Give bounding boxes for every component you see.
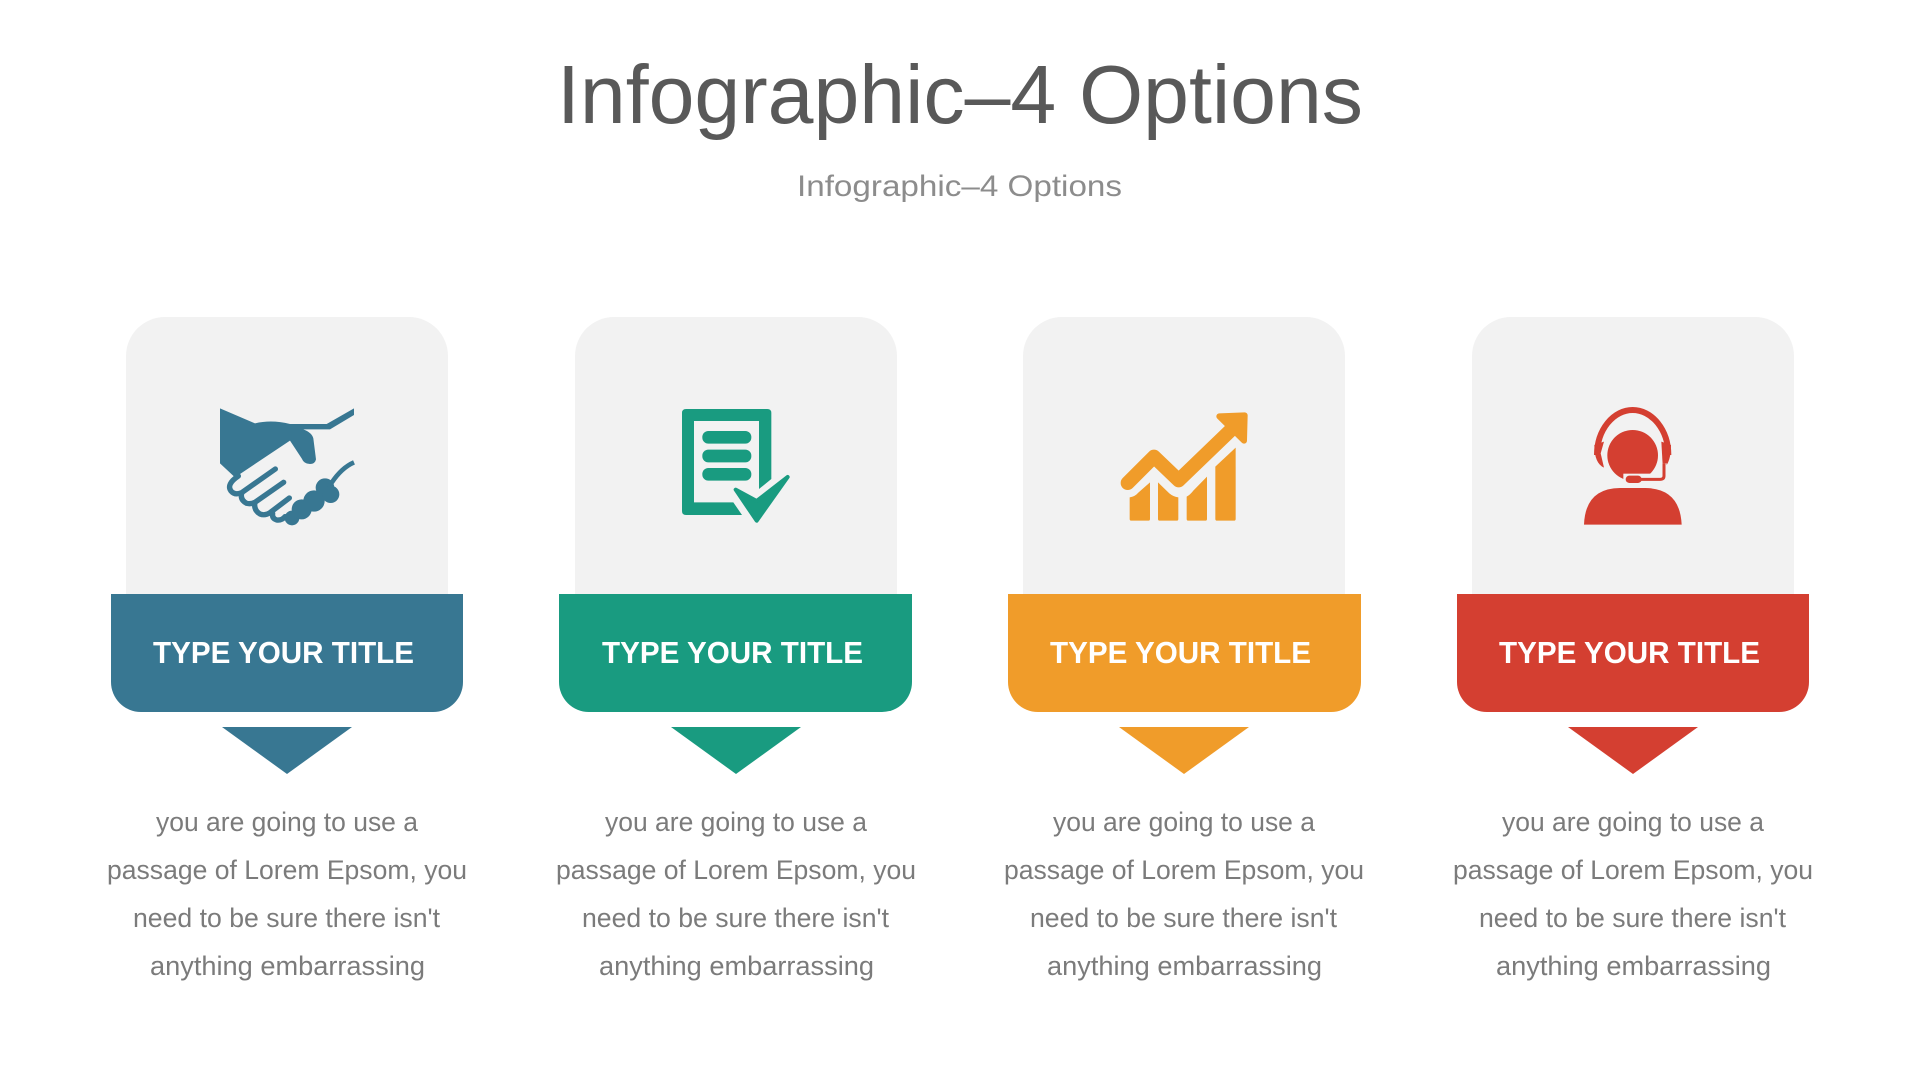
description text: anything embarrassing — [599, 951, 874, 981]
card background — [126, 317, 448, 594]
panel: option 4 support agent — [1453, 317, 1813, 981]
arrow pointer — [1119, 727, 1249, 774]
description text: you are going to use a — [605, 807, 868, 837]
band label: TYPE YOUR TITLE — [602, 635, 863, 670]
subtitle: Infographic–4 Options — [797, 170, 1122, 203]
description text: anything embarrassing — [1047, 951, 1322, 981]
description text — [107, 807, 467, 981]
description text: anything embarrassing — [150, 951, 425, 981]
description text: you are going to use a — [1502, 807, 1765, 837]
icon: checked document — [682, 409, 788, 521]
icon: rising bar chart with arrow — [1128, 415, 1245, 521]
card background — [575, 317, 897, 594]
description text: passage of Lorem Epsom, you — [556, 855, 916, 885]
title: Infographic–4 Options — [557, 48, 1363, 141]
description text: anything embarrassing — [1496, 951, 1771, 981]
icon: handshake — [220, 408, 354, 525]
description text: need to be sure there isn't — [582, 903, 889, 933]
description text: you are going to use a — [1053, 807, 1316, 837]
description text: passage of Lorem Epsom, you — [1004, 855, 1364, 885]
title band — [111, 594, 463, 712]
description text: passage of Lorem Epsom, you — [107, 855, 467, 885]
card background — [1023, 317, 1345, 594]
icon: headset agent — [1584, 410, 1682, 525]
description text — [1453, 807, 1813, 981]
panel: option 2 document — [556, 317, 916, 981]
title band — [559, 594, 912, 712]
description text: need to be sure there isn't — [133, 903, 440, 933]
band label: TYPE YOUR TITLE — [153, 635, 414, 670]
title band — [1008, 594, 1361, 712]
arrow pointer — [671, 727, 801, 774]
band label: TYPE YOUR TITLE — [1050, 635, 1311, 670]
description text: passage of Lorem Epsom, you — [1453, 855, 1813, 885]
panel: option 1 handshake — [107, 317, 467, 981]
band label: TYPE YOUR TITLE — [1499, 635, 1760, 670]
card background — [1472, 317, 1794, 594]
description text: need to be sure there isn't — [1030, 903, 1337, 933]
arrow pointer — [1568, 727, 1698, 774]
description text: need to be sure there isn't — [1479, 903, 1786, 933]
arrow pointer — [222, 727, 352, 774]
description text: you are going to use a — [156, 807, 419, 837]
panel: option 3 growth chart — [1004, 317, 1364, 981]
title band — [1457, 594, 1809, 712]
description text — [556, 807, 916, 981]
description text — [1004, 807, 1364, 981]
